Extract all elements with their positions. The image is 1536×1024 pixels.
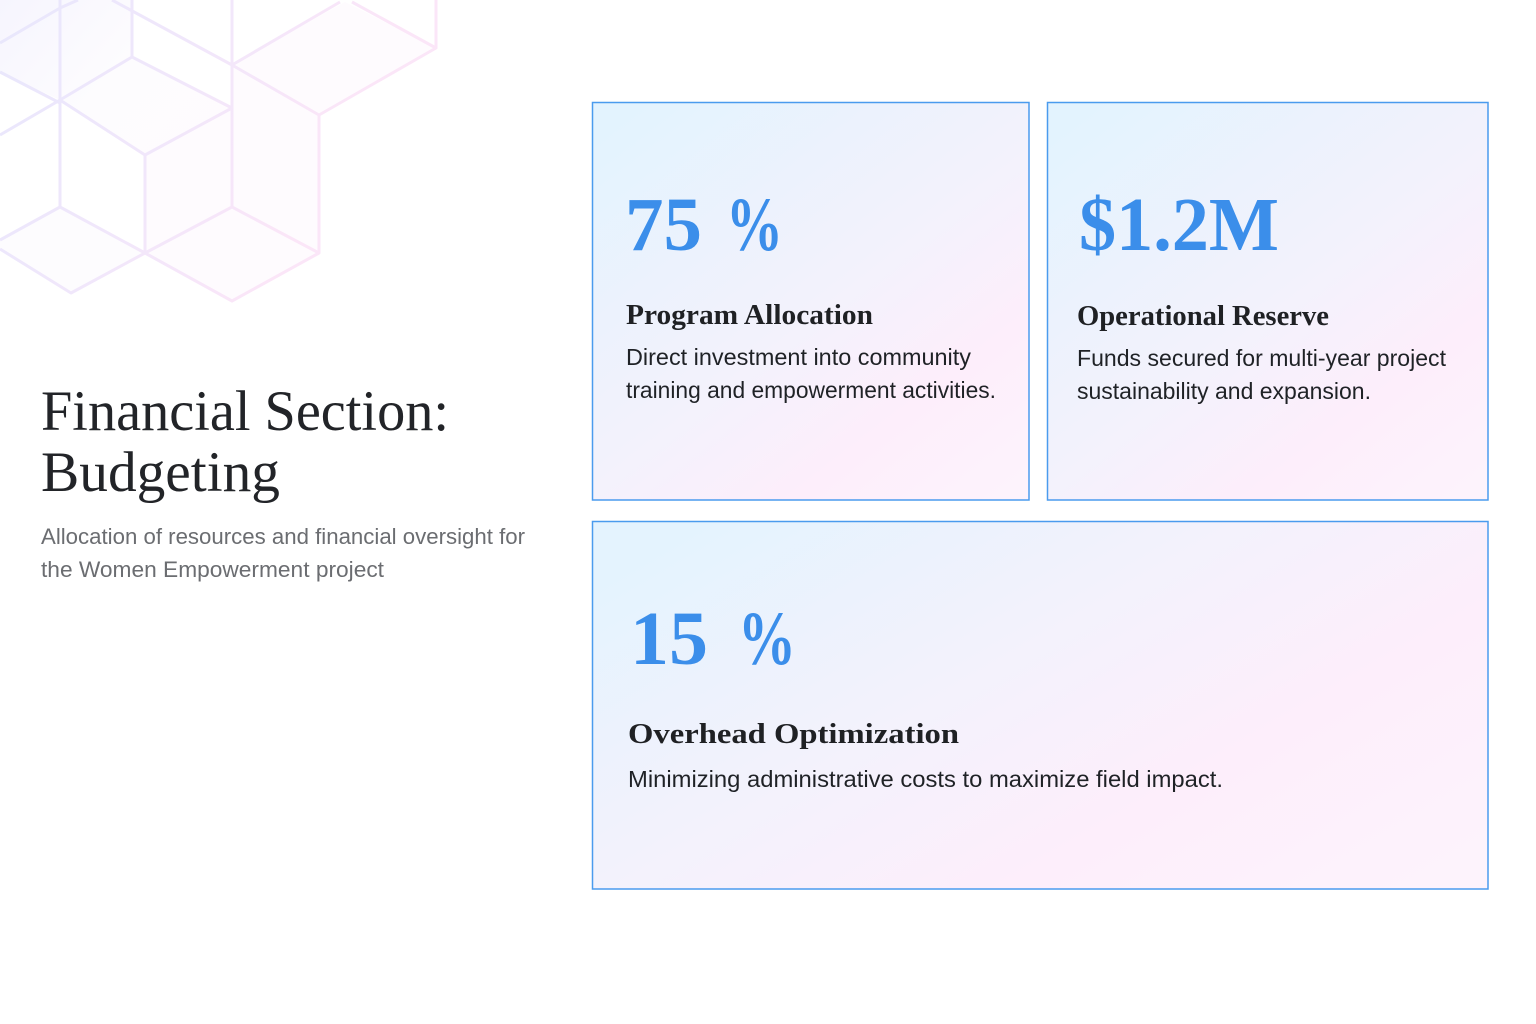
- description: overhead optimization: Minimizing administrative costs to maximize field impact.: [628, 766, 1223, 792]
- title: Financial Section:: [41, 380, 449, 443]
- subtitle: Allocation of resources and financial oversight for: [41, 524, 526, 549]
- stat: 75 %: 75: [625, 183, 702, 267]
- heading: overhead optimization: Overhead Optimization: [628, 718, 959, 750]
- title: [41, 380, 449, 504]
- heading: operational reserve: Operational Reserve: [1077, 300, 1329, 332]
- description: program allocation: training and empowerment activities.: [626, 377, 996, 403]
- panel: program allocation: [592, 102, 1029, 500]
- stat: $1.2M: $1.2M: [1079, 183, 1279, 267]
- description: program allocation: [626, 344, 996, 403]
- description: operational reserve: Funds secured for multi-year project: [1077, 345, 1447, 371]
- stat: 15 %: [630, 597, 796, 681]
- panel: overhead optimization: [592, 522, 1488, 889]
- panel: operational reserve: [1048, 102, 1488, 500]
- stat: 15 %: 15: [630, 597, 708, 681]
- subtitle: the Women Empowerment project: [41, 557, 385, 582]
- heading: program allocation: Program Allocation: [626, 299, 873, 331]
- stat: 75 %: %: [726, 183, 783, 267]
- description: operational reserve: [1077, 345, 1447, 404]
- stat: 15 %: %: [738, 597, 796, 681]
- subtitle: [41, 524, 526, 582]
- stat: 75 %: [625, 183, 783, 267]
- description: program allocation: Direct investment into community: [626, 344, 971, 370]
- decorative isometric hexagon pattern: [0, 0, 436, 301]
- description: operational reserve: sustainability and expansion.: [1077, 378, 1371, 404]
- title: Budgeting: [41, 441, 280, 504]
